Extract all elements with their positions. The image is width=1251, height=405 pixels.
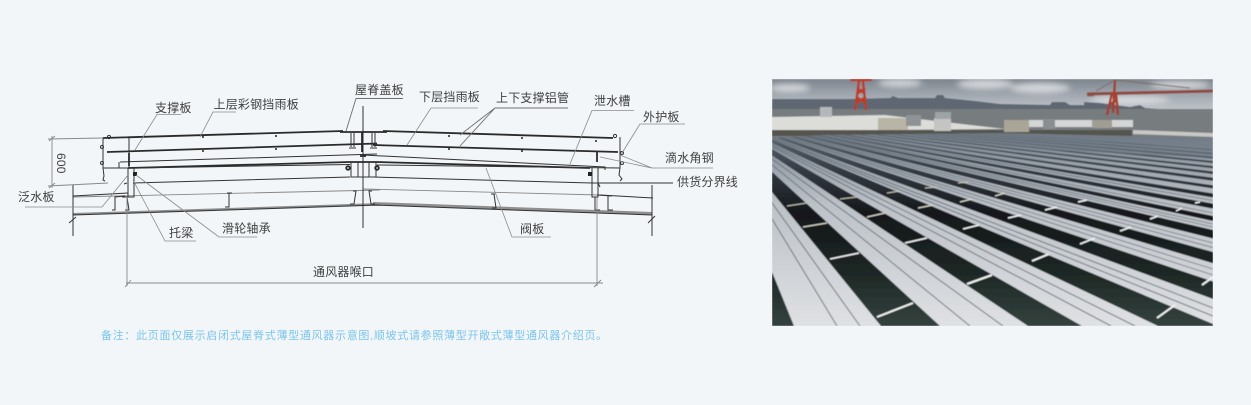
dimension: 600 height bbox=[48, 136, 108, 188]
label: 上下支撑铝管 bbox=[460, 90, 569, 146]
far haze over roof bbox=[962, 134, 1213, 158]
label: 下层挡雨板 bbox=[407, 90, 480, 145]
rooftop platform bbox=[772, 109, 1213, 138]
label: 外护板 bbox=[622, 110, 685, 153]
label: 上下支撑铝管: 上下支撑铝管 bbox=[496, 90, 569, 105]
lower rain shield bbox=[107, 144, 618, 152]
distant skyline bbox=[772, 94, 1157, 110]
label: 托梁: 托梁 bbox=[169, 225, 193, 240]
sky bbox=[772, 79, 1213, 110]
label: 滴水角钢: 滴水角钢 bbox=[665, 150, 714, 165]
rooftop equipment boxes bbox=[820, 107, 1112, 132]
label: 通风器喉口: 通风器喉口 bbox=[313, 265, 374, 279]
label: 支撑板: 支撑板 bbox=[155, 100, 192, 115]
label: 供货分界线: 供货分界线 bbox=[677, 174, 738, 189]
label: 滴水角钢 bbox=[600, 150, 714, 168]
diagram: roof ridge ventilator section bbox=[18, 83, 738, 287]
label: 屋脊盖板 bbox=[346, 83, 404, 131]
strip ribs bbox=[772, 135, 1213, 326]
label: 上层彩钢挡雨板: 上层彩钢挡雨板 bbox=[214, 98, 299, 112]
drainage trough and valve plate bbox=[119, 154, 620, 170]
label: 滑轮轴承: 滑轮轴承 bbox=[222, 220, 271, 236]
dimension: ventilator throat width bbox=[125, 197, 603, 287]
label: 下层挡雨板: 下层挡雨板 bbox=[419, 90, 480, 104]
label: 滑轮轴承 bbox=[136, 175, 271, 237]
Z purlins bbox=[225, 191, 496, 208]
light strip base bbox=[772, 130, 1213, 326]
label: 泛水板 bbox=[18, 175, 128, 207]
red tower crane right bbox=[1087, 80, 1213, 115]
clouds bbox=[770, 79, 1210, 104]
label: 托梁 bbox=[133, 180, 196, 241]
white cross bars bbox=[787, 182, 1213, 318]
note text: 备注：此页面仅展示启闭式屋脊式薄型通风器示意图,顺坡式请参照薄型开敞式薄型通风器介绍页。 bbox=[101, 328, 608, 342]
label: 阀板 bbox=[486, 168, 551, 237]
dark gaps between strips bbox=[772, 134, 1213, 326]
lower sash line and supply boundary bbox=[133, 177, 673, 183]
label: 屋脊盖板: 屋脊盖板 bbox=[355, 83, 404, 97]
roof panels bbox=[772, 132, 1213, 326]
upper colour steel rain shield bbox=[103, 131, 617, 142]
photo: installed ventilators on roof bbox=[772, 79, 1213, 326]
right end cap and posts bbox=[588, 137, 624, 210]
left end cap and posts bbox=[100, 138, 137, 210]
label: 阀板: 阀板 bbox=[520, 222, 544, 236]
label: 支撑板 bbox=[135, 100, 192, 150]
red tower crane left bbox=[850, 80, 872, 110]
label: 上层彩钢挡雨板 bbox=[200, 98, 299, 137]
label: 泛水板: 泛水板 bbox=[18, 190, 55, 204]
dimension: 600 height: 600 bbox=[54, 153, 68, 174]
ridge cap assembly bbox=[340, 132, 387, 177]
label: 泄水槽 bbox=[570, 94, 634, 164]
label: 外护板: 外护板 bbox=[643, 110, 680, 124]
curb and roof purlin lines bbox=[69, 106, 655, 236]
page canvas bbox=[18, 79, 1213, 340]
label: 泄水槽: 泄水槽 bbox=[594, 94, 631, 108]
